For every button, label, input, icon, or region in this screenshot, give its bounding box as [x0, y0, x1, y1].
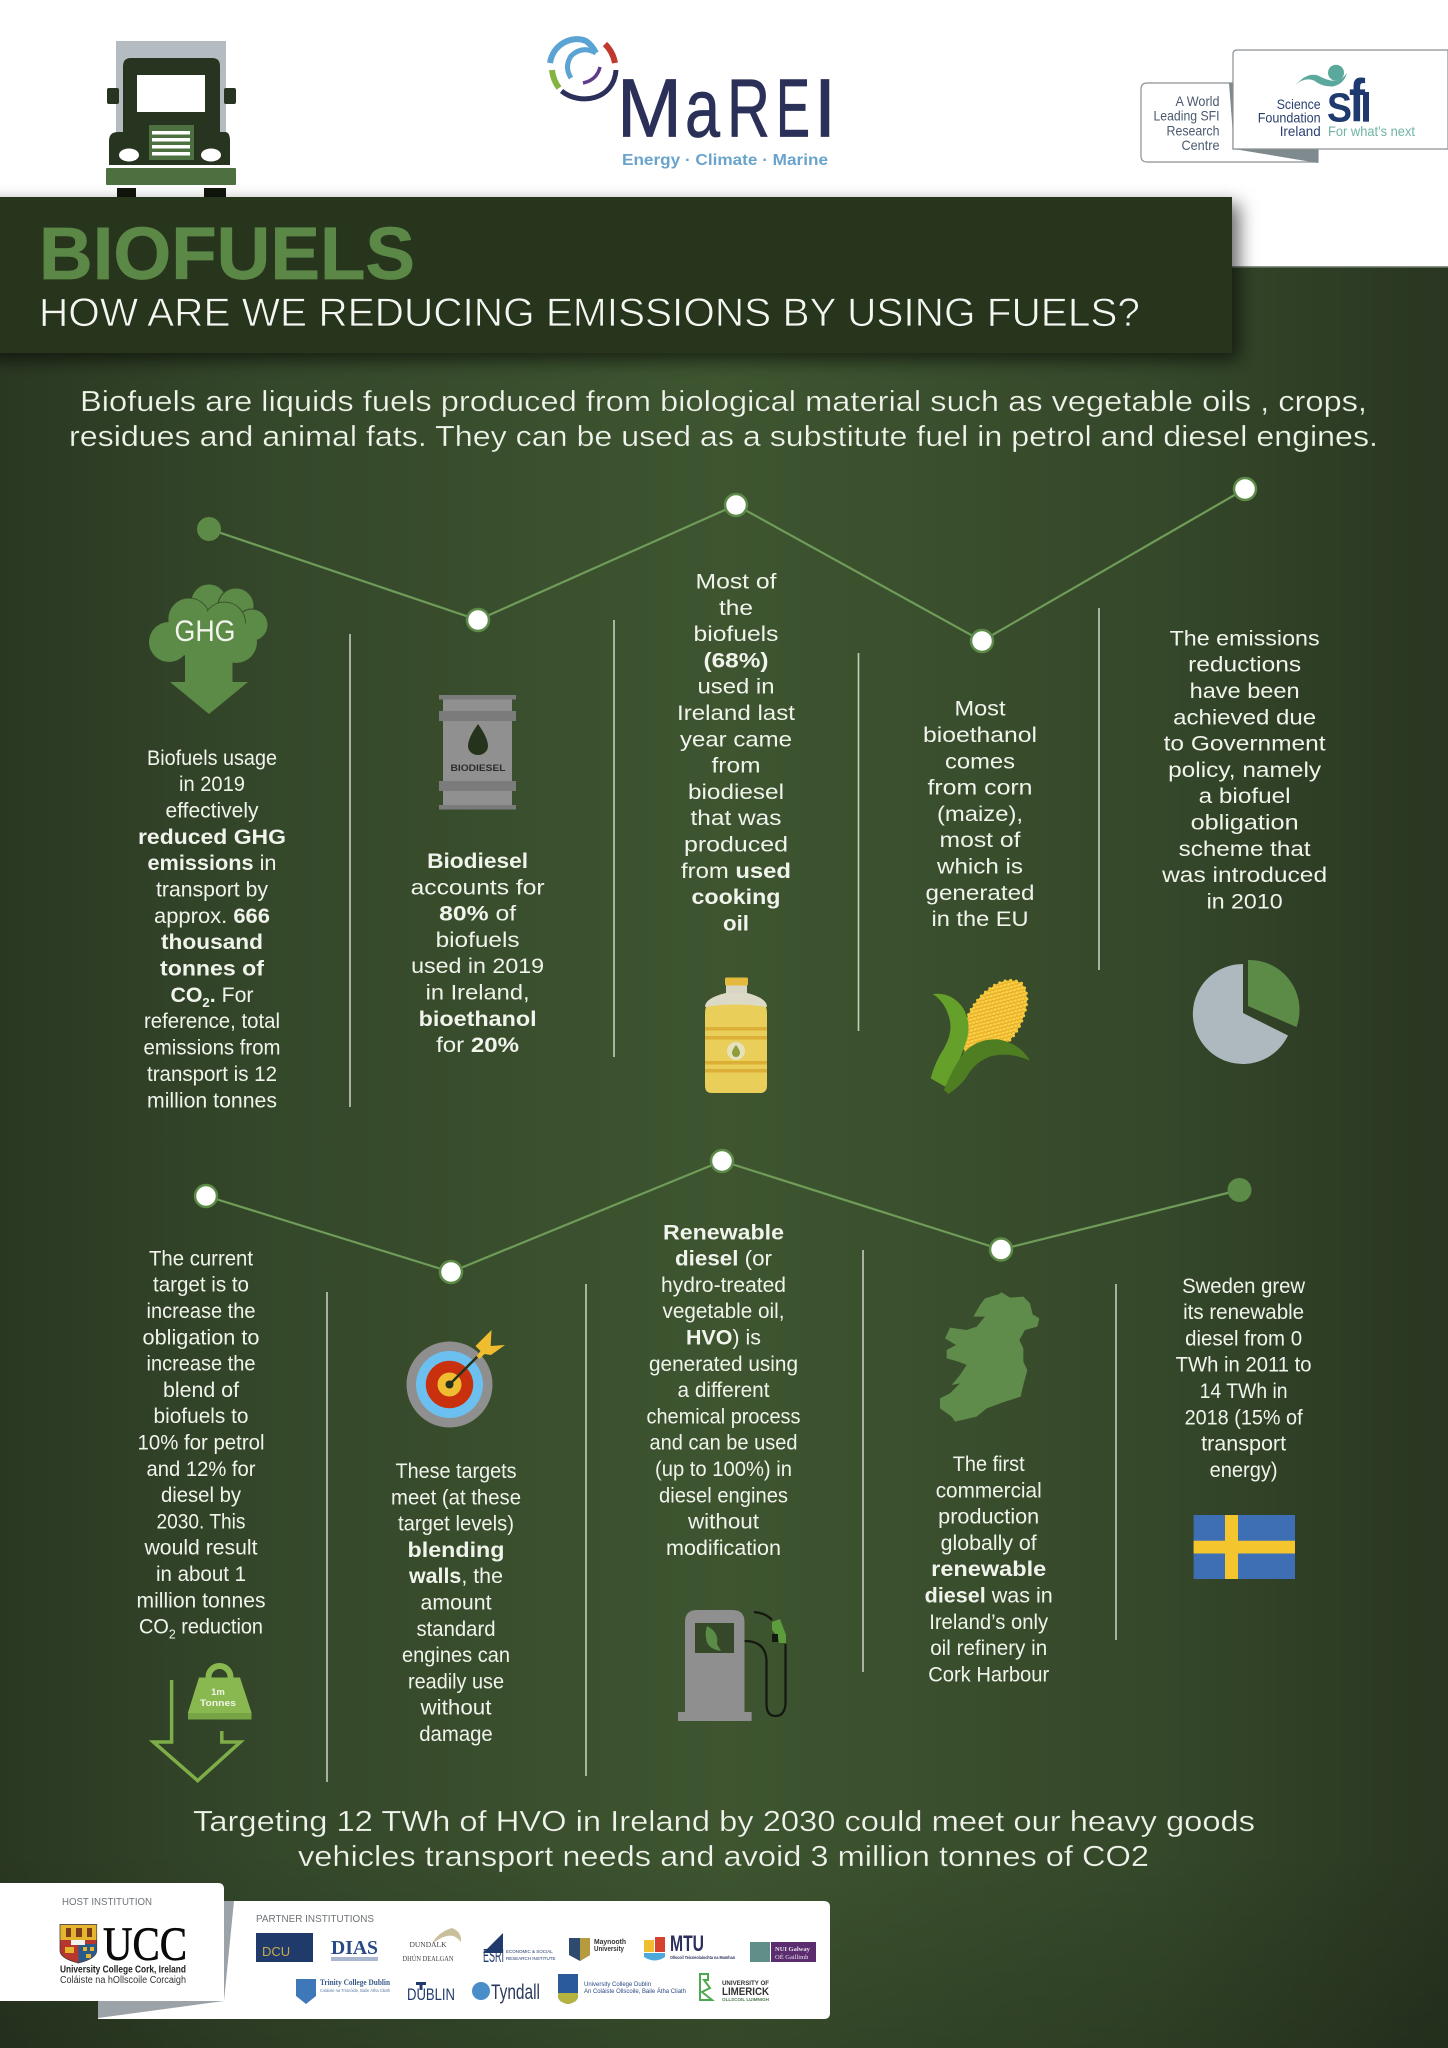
text: current target: 2030. This: [156, 1510, 246, 1533]
logo: Science Foundation Ireland: For what's next: [1328, 123, 1415, 139]
text: government policy: obligation: [1191, 812, 1299, 834]
panel: used cooking oil: [677, 570, 795, 1093]
text: used cooking oil: the: [719, 597, 753, 620]
icon: corn cob: [931, 980, 1030, 1094]
text: current target: blend of: [163, 1379, 239, 1402]
text: government policy: The emissions: [1170, 627, 1320, 650]
icon: biodiesel barrel: [439, 695, 516, 810]
text: used cooking oil: year came: [680, 728, 792, 751]
text: GHG reduction: transport is 12: [147, 1063, 277, 1086]
timeline: top row: [197, 478, 1256, 652]
icon: biodiesel barrel: BIODIESEL: [450, 763, 506, 774]
text: GHG reduction: 2: [202, 995, 210, 1010]
logo: MaREI: Energy · Climate · Marine: [622, 152, 828, 169]
text: renewable diesel: a different: [678, 1379, 770, 1402]
text: current target: increase the: [146, 1353, 256, 1376]
logo: DIAS: DIAS: [331, 1937, 378, 1959]
panel: blending walls: [391, 1330, 521, 1746]
panel: bioethanol from corn: [923, 698, 1037, 1094]
text: renewable diesel: vegetable oil,: [662, 1300, 784, 1323]
text: used cooking oil: from used: [681, 860, 791, 883]
text: blending walls: standard: [416, 1618, 496, 1641]
panel: Sweden: [1176, 1275, 1312, 1579]
logo: MaREI: I: [814, 62, 836, 155]
text: GHG reduction: For: [221, 984, 253, 1007]
text: renewable diesel: [646, 1221, 800, 1560]
text: Sweden: energy): [1210, 1459, 1278, 1482]
logo: Science Foundation Ireland: Foundation: [1258, 109, 1321, 125]
logo: UCC: Coláiste na hOllscoile Corcaigh: [60, 1975, 186, 1986]
text: blending walls: blending: [408, 1539, 504, 1562]
icon: GHG cloud with down arrow: GHG: [174, 615, 236, 648]
text: GHG reduction: CO: [170, 984, 202, 1007]
text: blending walls: without: [419, 1697, 492, 1720]
text: renewable diesel: (up to 100%) in: [655, 1458, 792, 1481]
timeline: bottom row: [195, 1150, 1252, 1283]
icon: one million tonnes weight and arrow: 1m: [211, 1687, 225, 1698]
text: biodiesel share: [411, 850, 545, 1057]
text: used cooking oil: that was: [690, 807, 782, 830]
logo: UCC: [60, 1918, 187, 1986]
logo: NUI Galway: NUI Galway: [775, 1946, 811, 1953]
text: Sweden: its renewable: [1183, 1301, 1304, 1324]
text: blending walls: engines can: [402, 1644, 510, 1667]
text: blending walls: meet (at these: [391, 1486, 521, 1509]
text: biodiesel share: for 20%: [436, 1034, 519, 1057]
text: used cooking oil: from: [712, 755, 760, 778]
logo: TU Dublin: [407, 1982, 455, 2004]
logo: NUI Galway: OÉ Gaillimh: [775, 1953, 809, 1961]
panel: partner institutions: [98, 1901, 830, 2019]
text: government policy: a biofuel: [1199, 785, 1291, 808]
text: blending walls: damage: [419, 1723, 493, 1746]
text: current target: reduction: [176, 1616, 263, 1639]
text: GHG reduction: reduced GHG: [138, 826, 286, 849]
heading: BIOFUELS: BIOFUELS: [39, 212, 415, 295]
text: Sweden: Sweden grew: [1182, 1275, 1306, 1298]
panel: biodiesel share: [411, 695, 545, 1057]
logo: UCD: University College Dublin: [584, 1981, 651, 1988]
text: used cooking oil: biofuels: [694, 623, 778, 646]
logo: Science Foundation Ireland: Centre: [1182, 137, 1220, 153]
heading: subtitle: HOW ARE WE REDUCING EMISSIONS BY USING FUELS?: [39, 291, 1140, 335]
logo: MTU: [644, 1931, 735, 1960]
text: current target: obligation to: [142, 1326, 260, 1349]
text: government policy: in 2010: [1207, 890, 1283, 913]
text: biodiesel share: biofuels: [436, 929, 520, 952]
text: bioethanol from corn: bioethanol: [923, 724, 1037, 747]
closing statement: [193, 1806, 1255, 1873]
icon: map of Ireland: [940, 1292, 1039, 1422]
text: GHG reduction: approx. 666: [154, 905, 270, 928]
text: biodiesel share: used in 2019: [411, 955, 544, 978]
logo: NUI Galway: [750, 1942, 816, 1962]
logo: UCD: An Coláiste Ollscoile, Baile Átha Cliath: [584, 1986, 686, 1995]
text: current target: and 12% for: [146, 1458, 256, 1481]
panel: host institution: [0, 1883, 224, 2001]
text: used cooking oil: biodiesel: [688, 781, 784, 804]
text: Sweden: TWh in 2011 to: [1176, 1354, 1312, 1377]
text: biodiesel share: 80% of: [439, 903, 516, 926]
text: current target: million tonnes: [136, 1589, 266, 1612]
text: government policy: achieved due: [1173, 706, 1316, 729]
text: current target: diesel by: [161, 1484, 241, 1507]
text: current target: [136, 1247, 266, 1642]
text: government policy: reductions: [1188, 654, 1301, 677]
logo: Maynooth: [569, 1938, 626, 1961]
logo: University of Limerick: UNIVERSITY OF: [722, 1980, 769, 1987]
text: Sweden: diesel from 0: [1185, 1327, 1302, 1350]
logo: DCU: DCU: [262, 1944, 290, 1959]
text: current target: CO: [139, 1616, 170, 1639]
text: blending walls: amount: [420, 1592, 492, 1614]
text: biodiesel share: in Ireland,: [426, 982, 530, 1004]
text: blending walls: walls, the: [408, 1565, 503, 1588]
logo: MaREI: E: [776, 62, 810, 155]
text: current target: biofuels to: [154, 1405, 248, 1428]
text: used cooking oil: (68%): [704, 649, 768, 672]
logo: ESRI: RESEARCH INSTITUTE: [506, 1956, 556, 1961]
text: first commercial production: oil refinery in: [930, 1637, 1047, 1660]
logo: MaREI: a: [685, 62, 721, 155]
title banner: [0, 197, 1232, 353]
text: current target: increase the: [146, 1300, 256, 1323]
text: used cooking oil: oil: [723, 912, 749, 935]
text: bioethanol from corn: in the EU: [932, 908, 1028, 931]
panel: current target: [136, 1247, 266, 1781]
panel: partner institutions: PARTNER INSTITUTIONS: [256, 1914, 374, 1925]
logo: TU Dublin: DUBLIN: [407, 1985, 455, 2004]
logo: Science Foundation Ireland: Research: [1166, 122, 1220, 138]
text: current target: would result: [143, 1537, 258, 1560]
text: Sweden: [1176, 1275, 1312, 1482]
logo: Science Foundation Ireland: Ireland: [1280, 123, 1321, 139]
text: used cooking oil: cooking: [692, 886, 780, 909]
text: renewable diesel: chemical process: [646, 1405, 800, 1428]
logo: Dundalk: DHÚN DEALGAN: [402, 1953, 454, 1963]
logo: University of Limerick: LIMERICK: [722, 1986, 769, 1998]
logo: ESRI: ESRI: [483, 1946, 504, 1966]
text: blending walls: These targets: [396, 1460, 516, 1483]
icon: pie chart: [1193, 960, 1299, 1064]
logo: Tyndall: Tyndall: [491, 1981, 540, 2004]
text: GHG reduction: [138, 747, 286, 1112]
text: blending walls: readily use: [408, 1670, 504, 1693]
panel: renewable diesel: [646, 1221, 800, 1721]
text: bioethanol from corn: generated: [926, 882, 1034, 905]
panel: host institution: HOST INSTITUTION: [62, 1897, 152, 1908]
text: GHG reduction: in 2019: [179, 773, 245, 796]
text: GHG reduction: emissions in: [148, 852, 276, 875]
text: GHG reduction: .: [210, 984, 216, 1007]
icon: truck: [106, 41, 236, 199]
text: government policy: scheme that: [1179, 838, 1311, 861]
logo: ESRI: ECONOMIC & SOCIAL: [506, 1949, 553, 1954]
text: current target: target is to: [153, 1274, 249, 1297]
icon: one million tonnes weight and arrow: [153, 1666, 252, 1781]
text: GHG reduction: thousand: [161, 931, 263, 954]
text: government policy: [1161, 627, 1327, 913]
text: renewable diesel: modification: [666, 1537, 781, 1560]
text: bioethanol from corn: most of: [940, 829, 1021, 852]
logo: ESRI: [483, 1933, 556, 1966]
text: bioethanol from corn: (maize),: [937, 803, 1023, 826]
logo: Science Foundation Ireland: S: [1327, 85, 1352, 131]
logo: Dundalk: [402, 1928, 461, 1963]
logo: UCC: UCC: [103, 1918, 187, 1971]
logo: Science Foundation Ireland: f: [1349, 68, 1366, 135]
logo: MaREI: R: [727, 62, 770, 155]
logo: MaREI: [550, 39, 836, 169]
text: Sweden: transport: [1201, 1433, 1286, 1456]
text: government policy: policy, namely: [1168, 759, 1322, 782]
text: Sweden: 2018 (15% of: [1185, 1406, 1303, 1429]
icon: oil bottle: [705, 978, 767, 1093]
icon: one million tonnes weight and arrow: Tonnes: [200, 1698, 236, 1709]
text: first commercial production: The first: [953, 1453, 1025, 1476]
text: renewable diesel: Renewable: [663, 1221, 784, 1244]
logo: DCU: [256, 1933, 313, 1962]
icon: target with arrow: [406, 1330, 505, 1428]
text: biodiesel share: accounts for: [411, 876, 545, 899]
logo: UCD: [558, 1974, 686, 2004]
logo: Maynooth: University: [594, 1946, 624, 1953]
text: blending walls: [391, 1460, 521, 1746]
text: used cooking oil: used in: [698, 676, 774, 699]
panel: government policy: [1161, 627, 1327, 1064]
text: first commercial production: renewable: [931, 1558, 1046, 1581]
text: current target: 2: [169, 1627, 176, 1642]
text: bioethanol from corn: which is: [936, 856, 1023, 878]
closing statement: vehicles transport needs and avoid 3 million tonnes of CO2: [298, 1841, 1149, 1873]
text: renewable diesel: and can be used: [650, 1432, 798, 1455]
text: first commercial production: Ireland’s only: [929, 1611, 1049, 1634]
intro text: Biofuels are liquids fuels produced from biological material such as vegetable oils , crops,: [80, 386, 1367, 418]
logo: Trinity College Dublin: Trinity College Dublin: [320, 1978, 390, 1987]
logo: University of Limerick: [700, 1974, 769, 2002]
text: GHG reduction: transport by: [156, 879, 269, 902]
logo: University of Limerick: OLLSCOIL LUIMNIGH: [722, 1997, 769, 2002]
text: first commercial production: Cork Harbour: [928, 1663, 1049, 1686]
text: renewable diesel: HVO) is: [686, 1326, 761, 1350]
closing statement: Targeting 12 TWh of HVO in Ireland by 2030 could meet our heavy goods: [193, 1806, 1255, 1838]
text: current target: 10% for petrol: [138, 1432, 264, 1454]
logo: UCC: University College Cork, Ireland: [60, 1964, 186, 1976]
text: used cooking oil: [677, 570, 795, 935]
text: Sweden: 14 TWh in: [1200, 1380, 1288, 1403]
logo: Maynooth: Maynooth: [594, 1939, 626, 1946]
logo: Science Foundation Ireland: A World: [1176, 93, 1220, 109]
text: government policy: was introduced: [1161, 864, 1327, 887]
text: used cooking oil: produced: [684, 834, 788, 856]
text: renewable diesel: diesel (or: [675, 1248, 772, 1271]
logo: Science Foundation Ireland: Science: [1277, 96, 1321, 112]
text: bioethanol from corn: from corn: [928, 777, 1032, 800]
logo: Science Foundation Ireland: Leading SFI: [1154, 108, 1220, 124]
text: blending walls: target levels): [398, 1513, 514, 1536]
text: first commercial production: globally of: [941, 1532, 1037, 1555]
text: bioethanol from corn: [923, 698, 1037, 931]
text: GHG reduction: million tonnes: [147, 1090, 277, 1112]
icon: fuel pump with leaf: [678, 1610, 786, 1721]
text: current target: in about 1: [156, 1563, 246, 1586]
icon: GHG cloud with down arrow: [149, 584, 268, 714]
logo: MTU: MTU: [670, 1931, 704, 1956]
panel: first commercial production: [925, 1292, 1053, 1686]
logo: Trinity College Dublin: Coláiste na Tríonóide, Baile Átha Cliath: [320, 1987, 390, 1993]
text: renewable diesel: without: [687, 1511, 759, 1534]
text: bioethanol from corn: Most: [954, 698, 1006, 721]
logo: Trinity College Dublin: [296, 1978, 390, 2004]
logo: MTU: Ollscoil Teicneolaíochta na Mumhan: [670, 1955, 735, 1960]
intro text: residues and animal fats. They can be used as a substitute fuel in petrol and diesel engines.: [69, 421, 1378, 453]
logo: Dundalk: DUNDALK: [409, 1940, 447, 1949]
text: current target: The current: [149, 1247, 253, 1270]
text: first commercial production: diesel was in: [925, 1584, 1053, 1608]
panel: GHG reduction: [138, 584, 286, 1112]
logo: Tyndall: [472, 1981, 540, 2004]
text: renewable diesel: diesel engines: [659, 1484, 788, 1507]
text: GHG reduction: reference, total: [144, 1010, 280, 1033]
text: used cooking oil: Ireland last: [677, 702, 795, 725]
text: GHG reduction: emissions from: [144, 1037, 280, 1060]
text: renewable diesel: hydro-treated: [661, 1274, 786, 1297]
text: bioethanol from corn: comes: [945, 750, 1015, 773]
text: first commercial production: commercial: [936, 1479, 1042, 1502]
text: GHG reduction: effectively: [166, 800, 259, 823]
text: biodiesel share: Biodiesel: [427, 850, 528, 873]
logo: MaREI: M: [617, 62, 682, 155]
text: government policy: have been: [1190, 680, 1300, 703]
text: GHG reduction: tonnes of: [160, 958, 265, 981]
text: biodiesel share: bioethanol: [419, 1008, 537, 1031]
text: renewable diesel: generated using: [649, 1353, 798, 1376]
logo: Science Foundation Ireland: [1141, 50, 1448, 163]
text: first commercial production: production: [938, 1506, 1039, 1529]
icon: Swedish flag: [1194, 1515, 1295, 1579]
text: used cooking oil: Most of: [696, 570, 777, 594]
text: first commercial production: [925, 1453, 1053, 1686]
text: government policy: to Government: [1164, 733, 1326, 756]
text: GHG reduction: Biofuels usage: [147, 747, 277, 770]
intro text: [69, 386, 1378, 453]
